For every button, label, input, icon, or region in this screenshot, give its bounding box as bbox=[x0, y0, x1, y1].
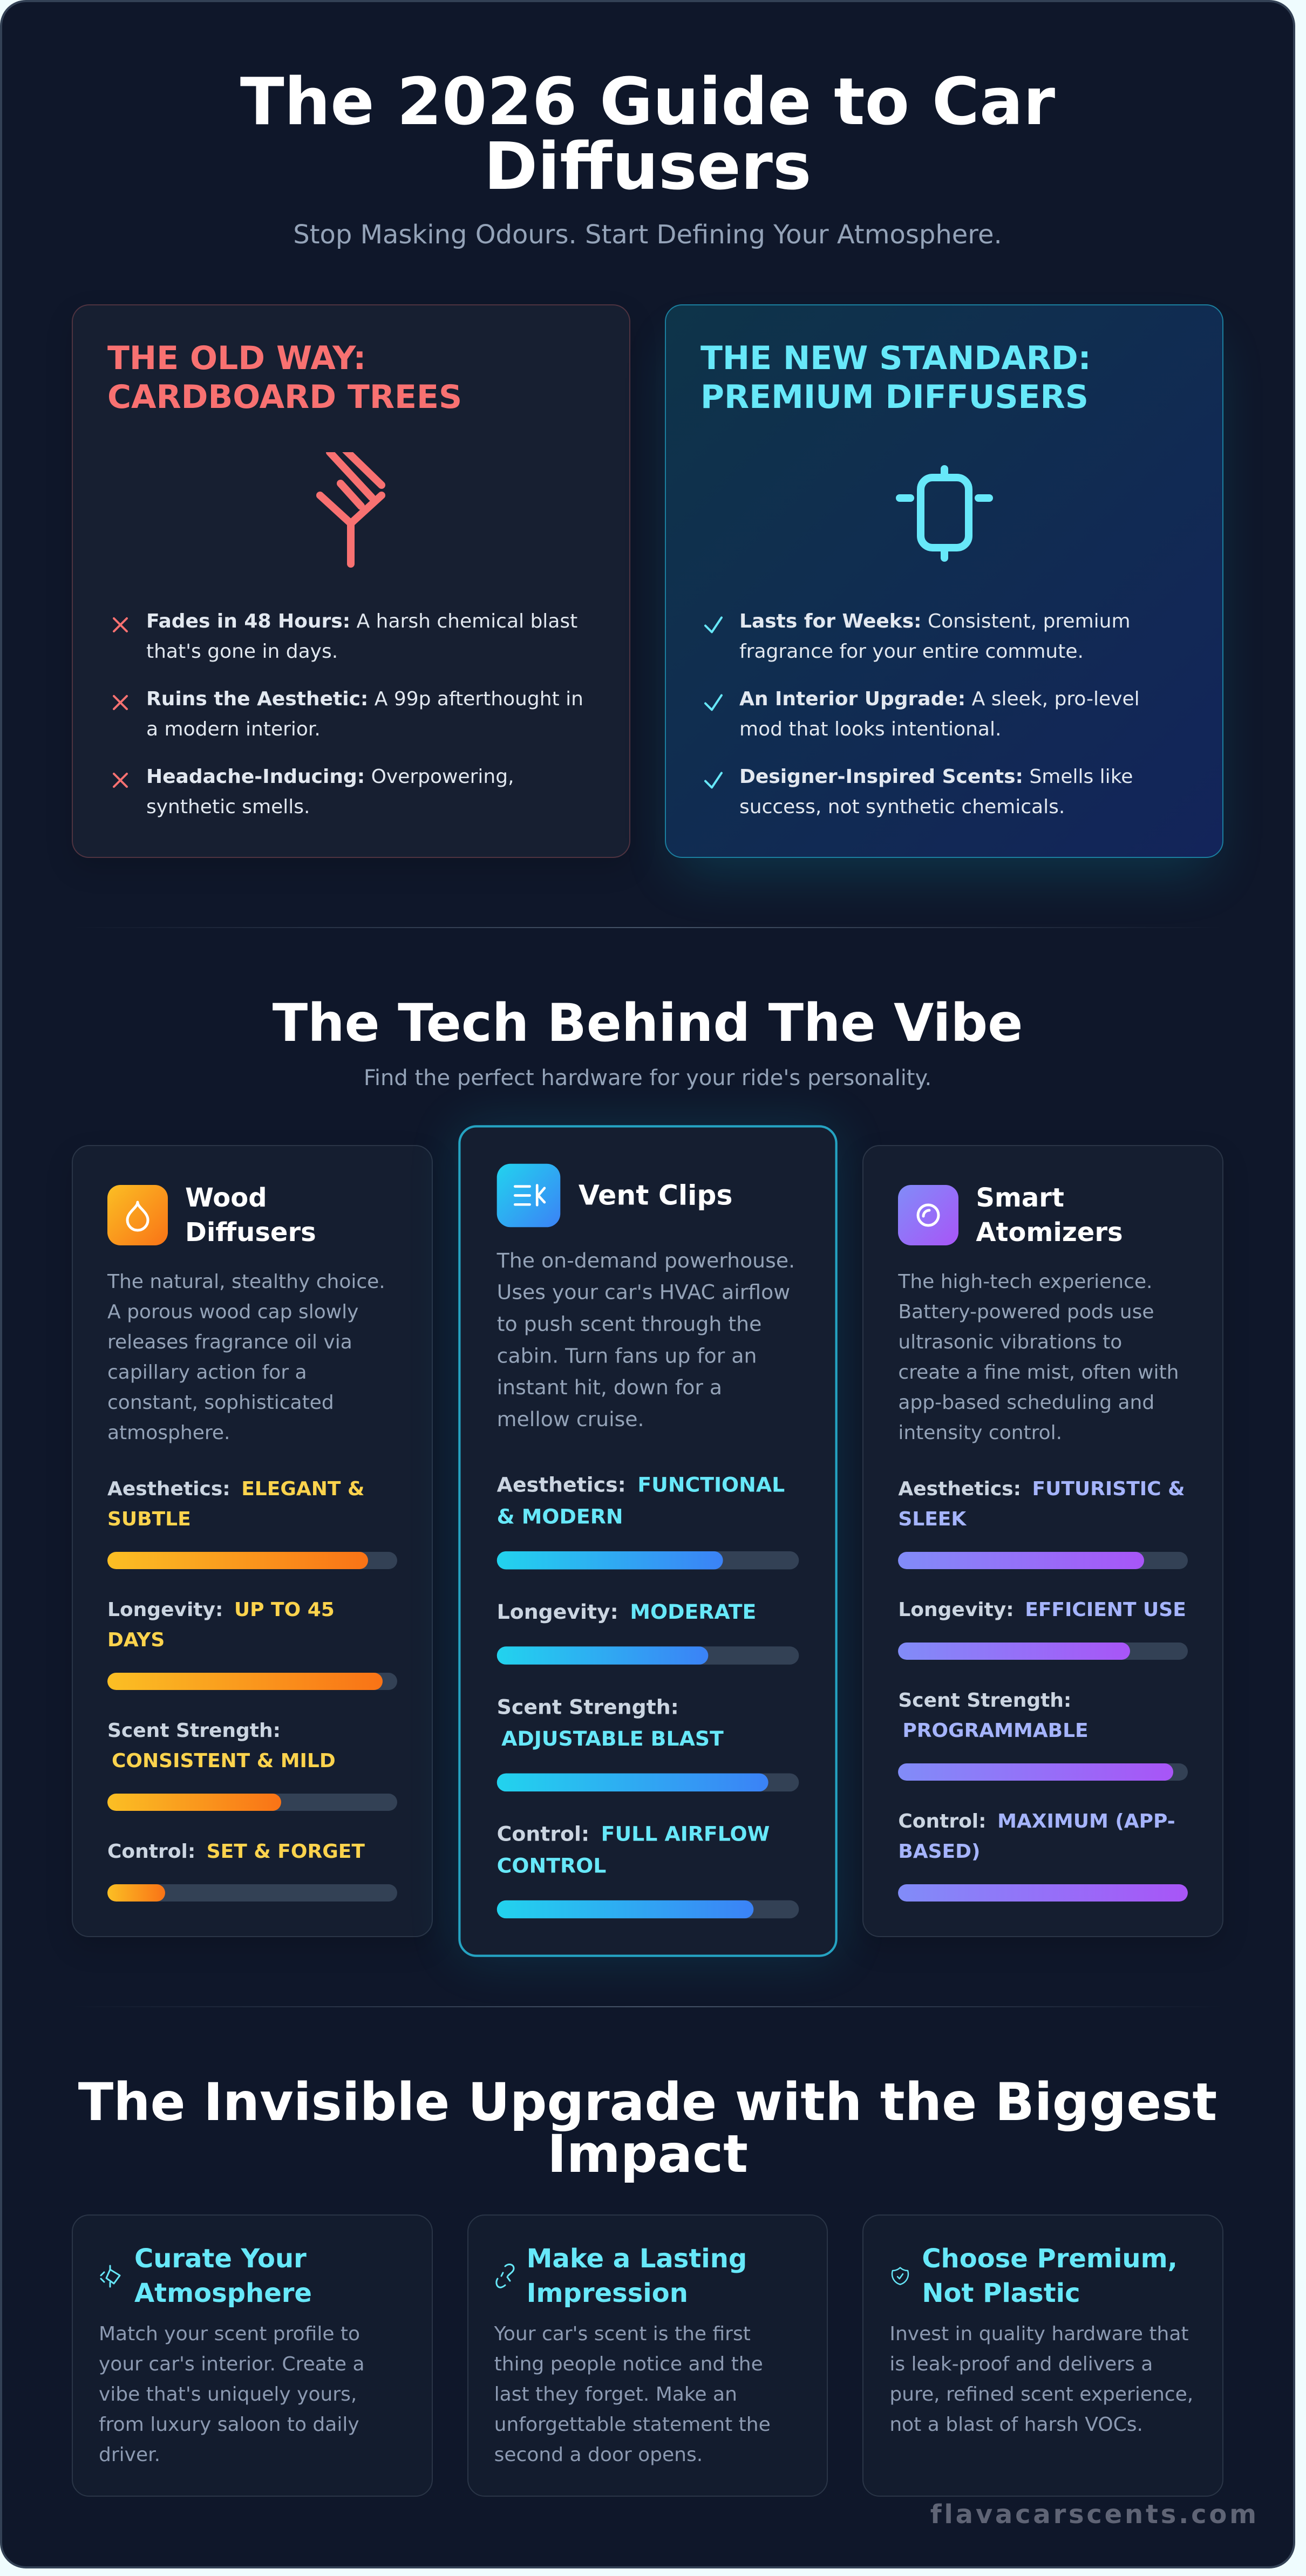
list item: scents: success, not synthetic chemicals. bbox=[739, 796, 1065, 818]
stat: scent strength bbox=[496, 1696, 799, 1791]
card title: wood: Wood bbox=[185, 1183, 267, 1213]
tip text: curate: Match your scent profile to your car's interior. Create a vibe that's uniquely yours, from luxury saloon to daily driver. bbox=[99, 2323, 365, 2466]
stat: control: Control: FULL AIRFLOW CONTROL bbox=[496, 1823, 770, 1878]
stat: control: Control: SET & FORGET bbox=[107, 1841, 365, 1863]
stat: longevity bbox=[496, 1600, 799, 1665]
panel: curate bbox=[72, 2214, 433, 2497]
card title: vent: Vent Clips bbox=[579, 1180, 732, 1211]
panel: wood diffusers bbox=[72, 1145, 433, 1937]
list item: lasts: fragrance for your entire commute. bbox=[739, 640, 1084, 663]
icon: vent bbox=[496, 1164, 560, 1227]
tip title: curate: Curate Your Atmosphere bbox=[134, 2244, 312, 2308]
stat: longevity bbox=[107, 1599, 397, 1690]
heading: new standard: THE NEW STANDARD: bbox=[700, 339, 1091, 377]
tip text: premium: Invest in quality hardware that is leak-proof and delivers a pure, refined scent experience, not a blast of harsh VOCs. bbox=[889, 2323, 1193, 2436]
icon: cardboard tree bbox=[316, 452, 385, 568]
icon: atmosphere bbox=[99, 2265, 120, 2287]
description: vent: The on-demand powerhouse. Uses your car's HVAC airflow to push scent through the cabin. Turn fans up for an instant hit, down for a mellow cruise. bbox=[496, 1249, 795, 1431]
heading: old way bbox=[107, 339, 462, 416]
stat: control bbox=[107, 1841, 397, 1902]
icon: shield check bbox=[889, 2265, 911, 2287]
list item: lasts: Lasts for Weeks: Consistent, premium bbox=[739, 610, 1131, 632]
icon: premium diffuser bbox=[896, 465, 993, 562]
list item: headache: synthetic smells. bbox=[146, 796, 310, 818]
title bbox=[240, 65, 1055, 205]
stat: scent strength bbox=[107, 1720, 397, 1811]
stat: scent strength: Scent Strength: ADJUSTABLE BLAST bbox=[496, 1696, 724, 1750]
description: wood: The natural, stealthy choice. A porous wood cap slowly releases fragrance oil via capillary action for a constant, sophisticated atmosphere. bbox=[107, 1271, 385, 1444]
panel: premium bbox=[862, 2214, 1223, 2497]
tip title: impression: Make a Lasting Impression bbox=[527, 2244, 747, 2308]
list item: ruins: a modern interior. bbox=[146, 718, 321, 740]
footer brand: flavacarscents.com bbox=[930, 2499, 1259, 2530]
stat: control bbox=[898, 1807, 1188, 1902]
stat: aesthetics bbox=[898, 1478, 1188, 1569]
icon: drop bbox=[107, 1185, 168, 1245]
heading: old way: CARDBOARD TREES bbox=[107, 378, 462, 416]
section heading: invisible upgrade bbox=[0, 2076, 1295, 2180]
list item: fades bbox=[112, 610, 577, 663]
panel: impression bbox=[467, 2214, 828, 2497]
stat: longevity: Longevity: MODERATE bbox=[496, 1600, 756, 1624]
list item: scents: Designer-Inspired Scents: Smells like bbox=[739, 766, 1133, 788]
list item: headache bbox=[112, 766, 514, 818]
card title: wood bbox=[185, 1183, 316, 1248]
title: The 2026 Guide to Car bbox=[240, 65, 1055, 140]
card header: smart bbox=[898, 1183, 1123, 1248]
heading: new standard: PREMIUM DIFFUSERS bbox=[700, 378, 1089, 416]
stat: control: Control: MAXIMUM (APP-BASED) bbox=[898, 1810, 1175, 1863]
stat: aesthetics bbox=[496, 1474, 799, 1569]
section subtitle: tech: Find the perfect hardware for your ride's personality. bbox=[364, 1066, 931, 1091]
list item: lasts bbox=[704, 610, 1131, 663]
tip header: premium bbox=[889, 2241, 1196, 2311]
section heading: invisible upgrade: The Invisible Upgrade with the Biggest bbox=[78, 2072, 1217, 2132]
panel: old way bbox=[72, 304, 630, 858]
card title: smart: Smart bbox=[976, 1183, 1064, 1213]
icon: atomizer bbox=[898, 1185, 958, 1245]
tip header: impression bbox=[494, 2241, 801, 2311]
tip title: premium: Choose Premium, Not Plastic bbox=[922, 2244, 1178, 2308]
heading: new standard bbox=[700, 339, 1091, 416]
stat: aesthetics: Aesthetics: ELEGANT & SUBTLE bbox=[107, 1478, 364, 1530]
list item: headache: Headache-Inducing: Overpowering, bbox=[146, 766, 514, 788]
list item: upgrade: mod that looks intentional. bbox=[739, 718, 1001, 740]
list item: fades: Fades in 48 Hours: A harsh chemical blast bbox=[146, 610, 577, 632]
title: Diffusers bbox=[484, 130, 811, 205]
list item: upgrade bbox=[704, 688, 1140, 740]
panel: vent clips bbox=[458, 1125, 837, 1957]
list item: scents bbox=[704, 766, 1133, 818]
icon: link bbox=[494, 2265, 516, 2287]
stat: longevity bbox=[898, 1599, 1188, 1660]
tip header: curate bbox=[99, 2241, 406, 2311]
list item: ruins: Ruins the Aesthetic: A 99p afterthought in bbox=[146, 688, 583, 710]
list item: fades: that's gone in days. bbox=[146, 640, 338, 663]
stat: scent strength bbox=[898, 1686, 1188, 1781]
stat: aesthetics: Aesthetics: FUTURISTIC & SLEEK bbox=[898, 1478, 1185, 1530]
section heading: invisible upgrade: Impact bbox=[547, 2124, 748, 2184]
stat: scent strength: Scent Strength: PROGRAMMABLE bbox=[898, 1689, 1089, 1742]
tip text: impression: Your car's scent is the first thing people notice and the last they forget. Make an unforgettable statement the second a door opens. bbox=[494, 2323, 771, 2466]
description: smart: The high-tech experience. Battery-powered pods use ultrasonic vibrations to create a fine mist, often with app-based scheduling and intensity control. bbox=[898, 1271, 1179, 1444]
card title: wood: Diffusers bbox=[185, 1217, 316, 1248]
stat: aesthetics: Aesthetics: FUNCTIONAL & MODERN bbox=[496, 1474, 785, 1529]
stat: longevity: Longevity: UP TO 45 DAYS bbox=[107, 1599, 335, 1651]
card header: vent bbox=[496, 1163, 732, 1227]
card title: smart: Atomizers bbox=[976, 1217, 1123, 1248]
section heading: tech: The Tech Behind The Vibe bbox=[273, 993, 1023, 1053]
heading: old way: THE OLD WAY: bbox=[107, 339, 366, 377]
list item: ruins bbox=[112, 688, 583, 740]
stat: aesthetics bbox=[107, 1478, 397, 1569]
stat: control bbox=[496, 1823, 799, 1919]
panel: smart atomizers bbox=[862, 1145, 1223, 1937]
stat: scent strength: Scent Strength: CONSISTENT & MILD bbox=[107, 1720, 336, 1772]
card title: smart bbox=[976, 1183, 1123, 1248]
stat: longevity: Longevity: EFFICIENT USE bbox=[898, 1599, 1186, 1621]
card header: wood bbox=[107, 1183, 316, 1248]
panel: new standard bbox=[665, 304, 1223, 858]
subtitle: Stop Masking Odours. Start Defining Your Atmosphere. bbox=[293, 220, 1002, 250]
list item: upgrade: An Interior Upgrade: A sleek, pro-level bbox=[739, 688, 1140, 710]
